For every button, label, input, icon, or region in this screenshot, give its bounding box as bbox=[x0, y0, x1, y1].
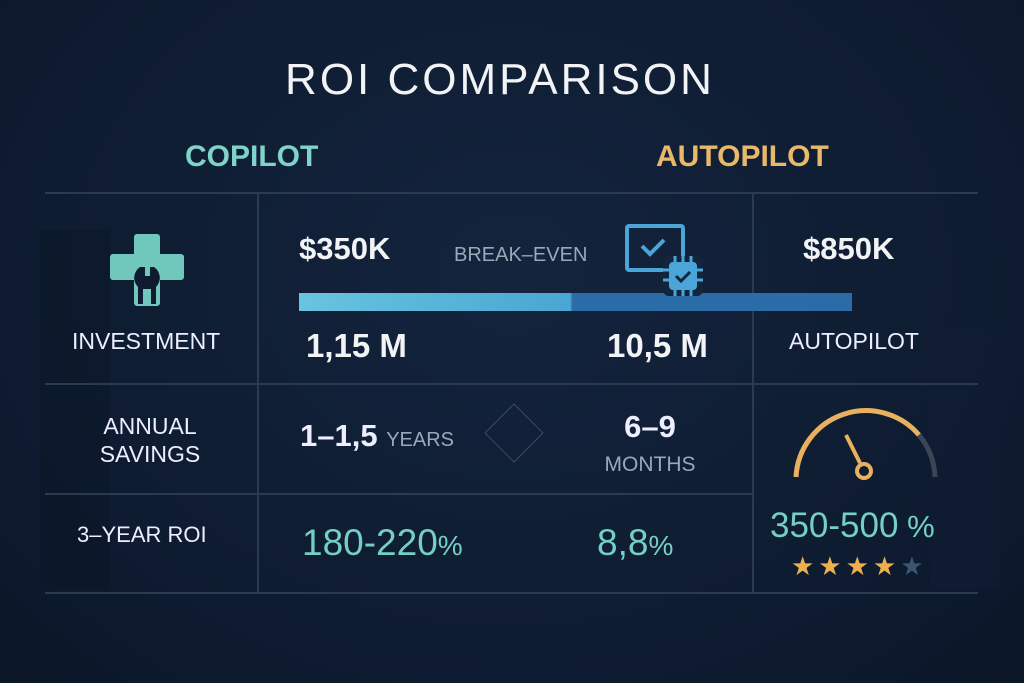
icon: monitor chip bbox=[625, 224, 703, 296]
value: 1,15 M: 1,15 M bbox=[306, 327, 407, 364]
icon: stars: ★★★★★ bbox=[791, 551, 928, 581]
value: 8,8%: 8,8% bbox=[597, 522, 673, 563]
label: break-even: BREAK–EVEN bbox=[454, 244, 587, 266]
icon: gauge bbox=[794, 408, 938, 480]
value: 6-9 months: MONTHS bbox=[604, 453, 696, 476]
bar bbox=[299, 293, 852, 311]
title: ROI COMPARISON bbox=[285, 55, 715, 104]
value: $850K: $850K bbox=[803, 231, 894, 266]
value: 350-500%: 350-500 % bbox=[770, 506, 935, 545]
heading: copilot: COPILOT bbox=[185, 140, 318, 173]
label: annual savings: ANNUAL bbox=[103, 413, 197, 439]
heading: autopilot: AUTOPILOT bbox=[656, 140, 829, 173]
label: annual savings bbox=[100, 413, 200, 467]
value: 1-1,5 years: 1–1,5 YEARS bbox=[300, 418, 454, 453]
icon: diamond bbox=[484, 403, 544, 463]
value: 180-220%: 180-220% bbox=[302, 522, 463, 563]
value: $350K: $350K bbox=[299, 231, 390, 266]
value: 6-9 months: 6–9 bbox=[624, 409, 676, 444]
label: 3-year roi: 3–YEAR ROI bbox=[77, 522, 207, 547]
icon: cross wrench bbox=[110, 234, 184, 306]
label: investment: INVESTMENT bbox=[72, 328, 220, 354]
value: 6-9 months bbox=[604, 409, 696, 476]
value: 10,5 M: 10,5 M bbox=[607, 327, 708, 364]
label: annual savings: SAVINGS bbox=[100, 441, 200, 467]
label: autopilot: AUTOPILOT bbox=[789, 328, 919, 354]
